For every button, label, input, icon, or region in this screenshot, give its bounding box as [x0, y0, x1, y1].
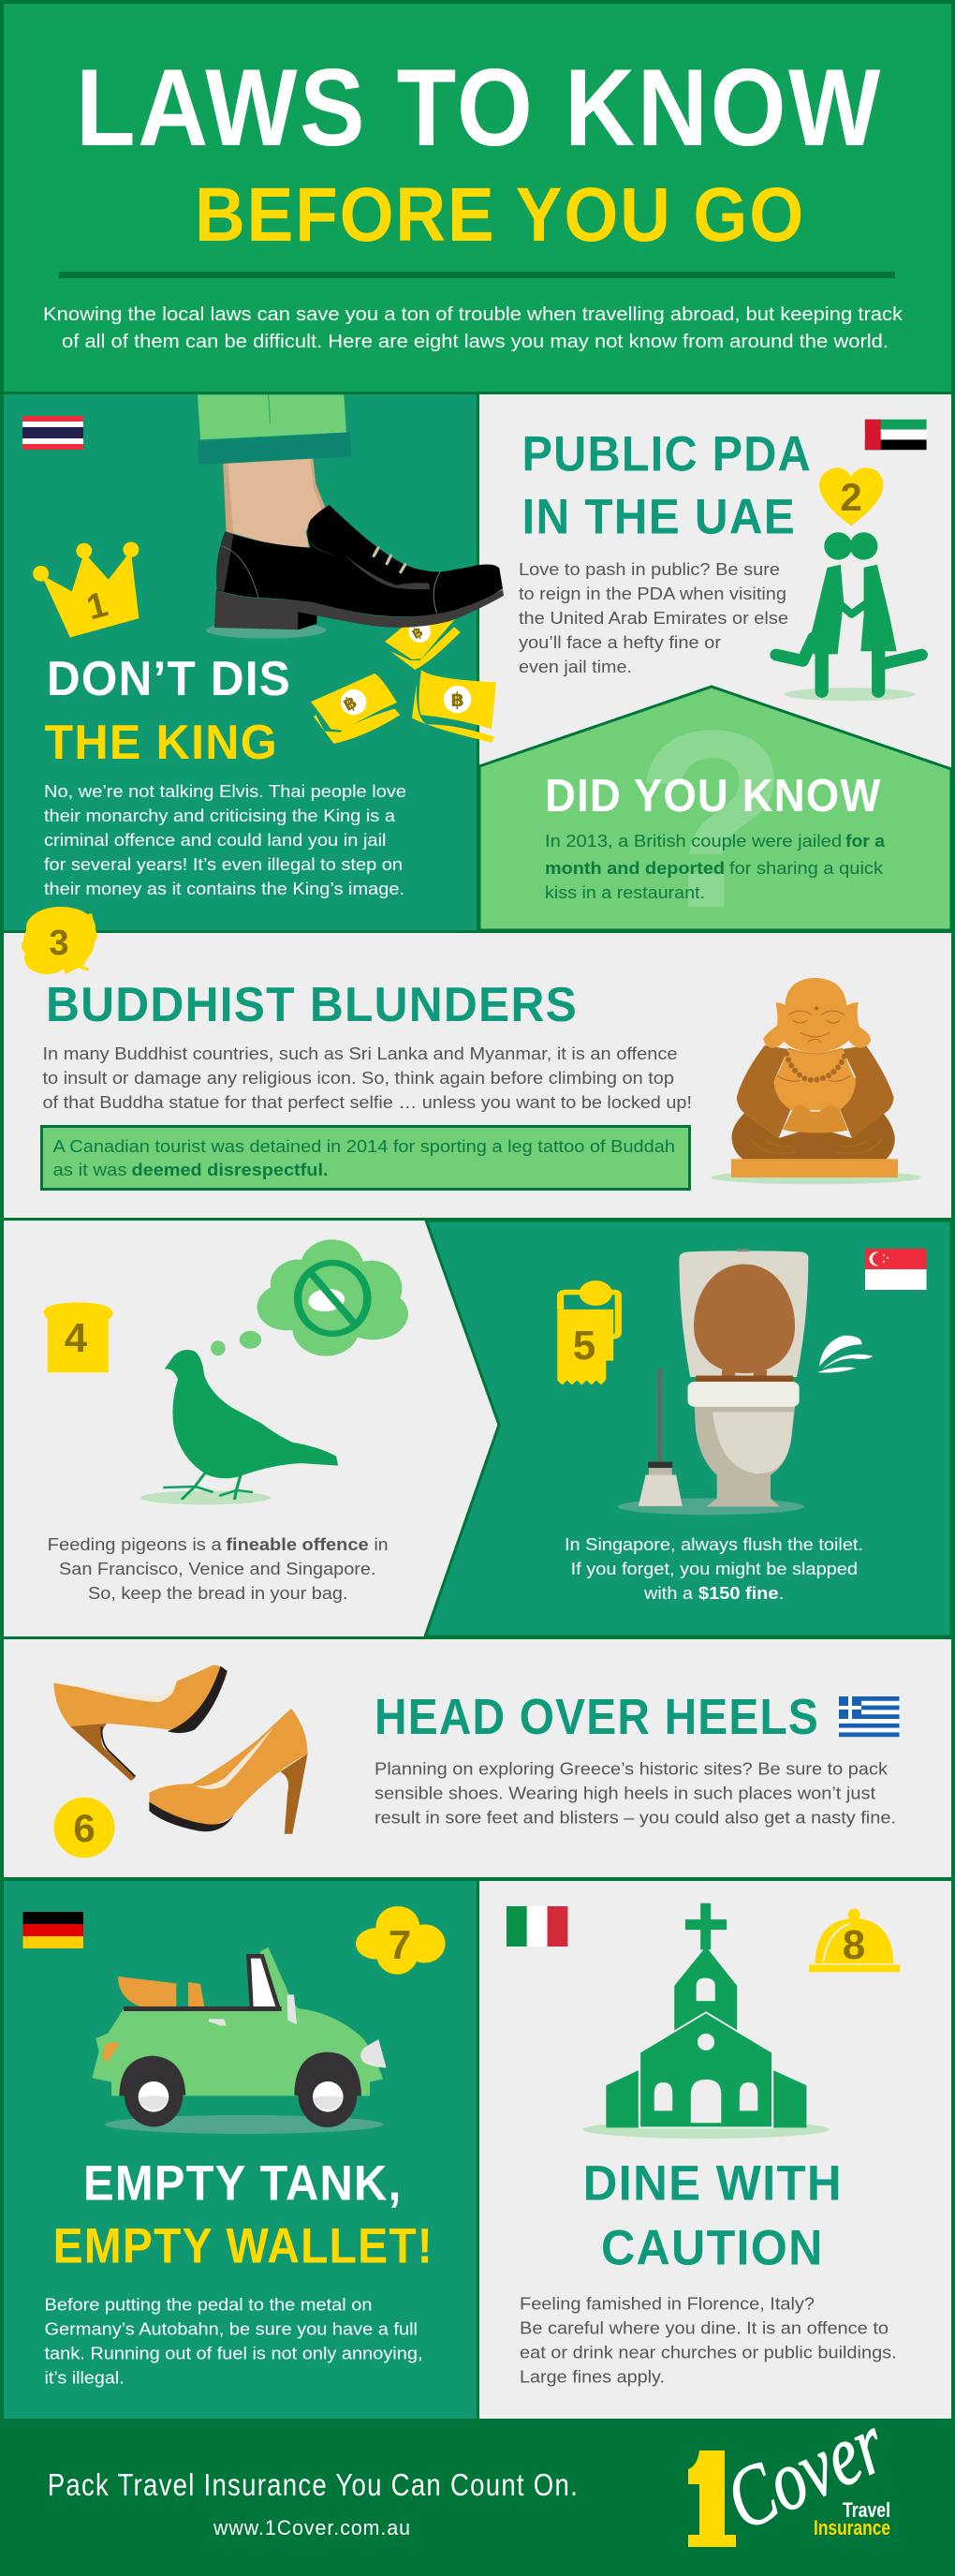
body text: toilet: In Singapore, always flush the toilet. [565, 1534, 863, 1554]
icon: money bills [311, 618, 496, 744]
body text: king: criminal offence and could land you in jail [44, 830, 386, 850]
body text: toilet: $150 fine [698, 1583, 779, 1603]
icon: cloud number 7 [356, 1906, 446, 1975]
callout: canadian tourist: as it was [52, 1160, 127, 1179]
body text: PDA: even jail time. [519, 657, 632, 676]
body text: toilet: with a [643, 1583, 694, 1603]
body text: heels: Planning on exploring Greece’s historic sites? Be sure to pack [375, 1759, 889, 1779]
heading: dine with caution: CAUTION [601, 2220, 824, 2276]
body text: heels [375, 1759, 896, 1828]
body text: pigeons: fineable offence [226, 1534, 369, 1554]
body text: PDA: the United Arab Emirates or else [519, 608, 788, 628]
icon: number 6 [54, 1798, 114, 1858]
panel: pigeons and toilets [4, 1221, 951, 1636]
body text: heels: result in sore feet and blisters – you could also get a nasty fine. [375, 1808, 896, 1828]
panel: public PDA in the UAE [479, 394, 951, 961]
illustration: church [583, 1903, 829, 2139]
body text: dine: Be careful where you dine. It is an offence to [520, 2317, 889, 2338]
body text: dine [520, 2293, 897, 2387]
body text: empty tank: Germany’s Autobahn, be sure you have a full [45, 2319, 418, 2339]
flag: UAE [865, 420, 927, 450]
panel: header [4, 4, 951, 392]
heading: don't dis the king [45, 652, 291, 770]
callout: canadian tourist: A Canadian tourist was detained in 2014 for sporting a leg tattoo of Buddah [52, 1136, 675, 1156]
question mark: ? [635, 679, 788, 961]
footer url: www.1Cover.com.au [213, 2516, 411, 2539]
body text: pigeons [48, 1534, 388, 1603]
icon: toilet paper number 5 [557, 1281, 618, 1384]
body text: buddhist [43, 1044, 692, 1112]
body text: king: for several years! It’s even illegal to step on [44, 854, 403, 874]
icon: money bills: ฿ [409, 623, 426, 643]
icon: thought bubble with no-bread sign [211, 1239, 408, 1356]
icon: kissing couple [776, 532, 921, 701]
logo: 1Cover Travel Insurance: Cover [713, 2395, 899, 2548]
heading: empty tank empty wallet: EMPTY WALLET! [53, 2218, 433, 2274]
body text: toilet: If you forget, you might be slapped [571, 1559, 858, 1578]
body text: buddhist: of that Buddha statue for that perfect selfie … unless you want to be locked up! [43, 1092, 692, 1112]
body text: toilet: . [779, 1583, 784, 1603]
callout: canadian tourist [41, 1126, 689, 1190]
heading: dine with caution: DINE WITH [583, 2156, 843, 2212]
heading: public PDA: IN THE UAE [522, 489, 796, 545]
fact text: for sharing a quick [729, 858, 884, 878]
icon: bread number 4: 4 [65, 1315, 88, 1361]
illustration: buddha statue [711, 978, 921, 1184]
fact text [545, 831, 886, 902]
icon: money bills: ฿ [340, 692, 360, 716]
heading: dine with caution [583, 2156, 843, 2276]
fact text: for a [845, 831, 886, 851]
body text: dine: eat or drink near churches or public buildings. [520, 2342, 897, 2362]
panel: did you know [479, 679, 951, 961]
body text: buddhist: In many Buddhist countries, such as Sri Lanka and Myanmar, it is an offence [43, 1044, 678, 1063]
logo: 1Cover Travel Insurance: Travel [843, 2498, 890, 2522]
fact text: In 2013, a British couple were jailed [545, 831, 842, 851]
flag: Greece [839, 1696, 899, 1737]
illustration: foot on money [198, 394, 504, 639]
body text: king: No, we’re not talking Elvis. Thai people love [44, 781, 406, 801]
fact text: kiss in a restaurant. [545, 882, 705, 902]
body text: pigeons: So, keep the bread in your bag. [88, 1583, 348, 1603]
flag: Germany [22, 1912, 83, 1948]
heading: empty tank empty wallet [53, 2156, 433, 2274]
callout: canadian tourist: deemed disrespectful. [131, 1160, 328, 1179]
body text: PDA [519, 559, 788, 676]
body text: pigeons: in [375, 1534, 388, 1554]
body text: pigeons: Feeding pigeons is a [48, 1534, 222, 1554]
icon: leaf number 3: 3 [49, 924, 69, 963]
heading: buddhist blunders: BUDDHIST BLUNDERS [46, 978, 578, 1032]
footer [0, 2395, 955, 2576]
icon: bread number 4 [44, 1302, 112, 1372]
intro text: of all of them can be difficult. Here are eight laws you may not know from around the world. [62, 331, 889, 352]
panel: buddhist blunders [4, 933, 951, 1218]
body text: heels: sensible shoes. Wearing high heels in such places won’t just [375, 1784, 876, 1803]
illustration: toilet and brush [618, 1249, 873, 1515]
logo: 1Cover Travel Insurance [688, 2395, 899, 2576]
heading: don't dis the king: THE KING [45, 716, 278, 770]
body text: empty tank: tank. Running out of fuel is not only annoying, [45, 2344, 423, 2363]
footer tagline: Pack Travel Insurance You Can Count On. [48, 2467, 579, 2502]
body text: king [44, 781, 406, 898]
panel: empty tank [4, 1881, 477, 2419]
panel: singapore arrow [425, 1221, 951, 1636]
icon: toilet paper number 5: 5 [573, 1323, 595, 1369]
flag: Singapore [865, 1249, 927, 1290]
panel: dine with caution [479, 1881, 951, 2419]
body text: empty tank: it’s illegal. [45, 2368, 125, 2388]
flag: Italy [507, 1906, 567, 1947]
icon: number 6: 6 [73, 1806, 96, 1850]
body text: king: their monarchy and criticising the King is a [44, 806, 396, 825]
illustration: convertible car [92, 1947, 387, 2134]
icon: leaf number 3 [22, 907, 97, 974]
heading: public PDA: PUBLIC PDA [522, 427, 812, 481]
heading: head over heels: HEAD OVER HEELS [375, 1689, 819, 1745]
illustration: high heels [53, 1665, 308, 1834]
heading: don't dis the king: DON’T DIS [47, 652, 291, 706]
icon: heart number 2: 2 [840, 475, 862, 519]
panel: don't dis the king [4, 394, 504, 930]
icon: crown number 1: 1 [82, 585, 112, 628]
icon: cloche number 8 [809, 1909, 900, 1972]
body text: toilet [565, 1534, 863, 1603]
fact text: month and deported [545, 858, 725, 878]
body text: pigeons: San Francisco, Venice and Singapore. [59, 1559, 376, 1578]
heading: public PDA [522, 427, 812, 545]
body text: buddhist: to insult or damage any religious icon. So, think again before climbing on top [43, 1068, 674, 1088]
icon: crown number 1 [33, 541, 139, 638]
body text: dine: Feeling famished in Florence, Italy? [520, 2293, 815, 2314]
flag: Thailand [22, 416, 83, 450]
body text: PDA: to reign in the PDA when visiting [519, 584, 786, 603]
body text: dine: Large fines apply. [520, 2366, 665, 2387]
icon: cloud number 7: 7 [389, 1922, 411, 1968]
icon: cloche number 8: 8 [843, 1922, 865, 1968]
body text: empty tank [45, 2295, 423, 2388]
body text: king: their money as it contains the King’s image. [44, 879, 404, 898]
intro text [43, 303, 904, 352]
intro text: Knowing the local laws can save you a ton of trouble when travelling abroad, but keeping track [43, 303, 904, 325]
body text: empty tank: Before putting the pedal to the metal on [45, 2295, 373, 2315]
panel: head over heels [4, 1639, 951, 1877]
body text: PDA: Love to pash in public? Be sure [519, 559, 780, 579]
logo: 1Cover Travel Insurance: Insurance [814, 2516, 890, 2539]
heading: empty tank empty wallet: EMPTY TANK, [83, 2156, 402, 2212]
subtitle: BEFORE YOU GO [195, 172, 805, 258]
illustration: pigeon [140, 1350, 338, 1504]
heading: did you know: DID YOU KNOW [545, 771, 882, 822]
icon: money bills: ฿ [450, 688, 464, 711]
logo: 1Cover Travel Insurance: 1 [690, 2421, 733, 2576]
body text: PDA: you’ll face a hefty fine or [519, 632, 721, 652]
icon: heart number 2 [819, 467, 883, 526]
